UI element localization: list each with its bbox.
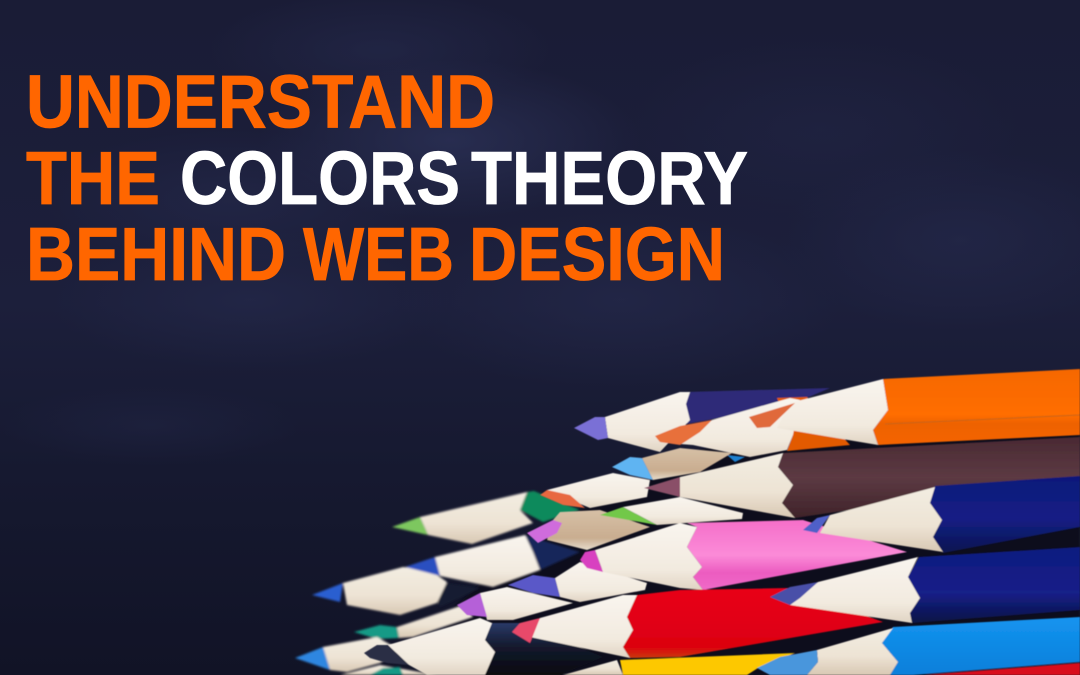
title line 1: UNDERSTAND bbox=[26, 60, 495, 144]
sharper middle and front pencils bbox=[364, 369, 1080, 675]
pencil: yellow bbox=[563, 653, 795, 675]
pencil: blue bbox=[757, 617, 1080, 675]
pencil: black bbox=[364, 618, 603, 675]
title line 3: web: WEB bbox=[303, 212, 454, 296]
pencil: bottom teal tip bbox=[340, 665, 437, 675]
title line 3: behind: BEHIND bbox=[26, 212, 286, 296]
title line 2: colors: COLORS bbox=[180, 136, 460, 220]
pencil: orange bbox=[749, 369, 1080, 445]
pencil: green tip bbox=[392, 491, 580, 544]
pencil: blue tip with dark body bbox=[312, 567, 480, 615]
pencil: navy lower bbox=[770, 547, 1080, 623]
pencil stack bbox=[295, 369, 1080, 675]
pencil: blue tip with navy body bbox=[405, 535, 580, 587]
pencil: magenta tip raw wood bbox=[527, 510, 650, 550]
pencil: brown bbox=[644, 437, 1080, 518]
pencil: orange tip second bbox=[655, 397, 850, 457]
title line 3: design: DESIGN bbox=[469, 212, 725, 296]
pencil: violet tip navy body bbox=[574, 388, 830, 452]
blurred back-left pencils bbox=[295, 491, 580, 675]
pencil: violet tip cream bbox=[508, 562, 647, 602]
pencil: light blue tip bbox=[612, 448, 745, 480]
pencil: magenta small tip bbox=[457, 587, 573, 620]
pencil: red bbox=[512, 588, 883, 658]
shadow behind stack bbox=[440, 400, 1080, 675]
pencil: pink bbox=[580, 520, 907, 590]
pencil: bottom-left blue tip bbox=[295, 637, 400, 672]
title bbox=[26, 60, 748, 296]
pencil: orange-red tip bbox=[540, 473, 650, 508]
pencil: teal tip bbox=[354, 605, 473, 639]
title line 2: theory: THEORY bbox=[471, 136, 748, 220]
pencil: navy upper bbox=[803, 476, 1080, 553]
pencil: green tip cream bbox=[600, 497, 743, 525]
pencil: red bottom right bbox=[925, 663, 1080, 675]
title line 2: the: THE bbox=[26, 136, 160, 220]
